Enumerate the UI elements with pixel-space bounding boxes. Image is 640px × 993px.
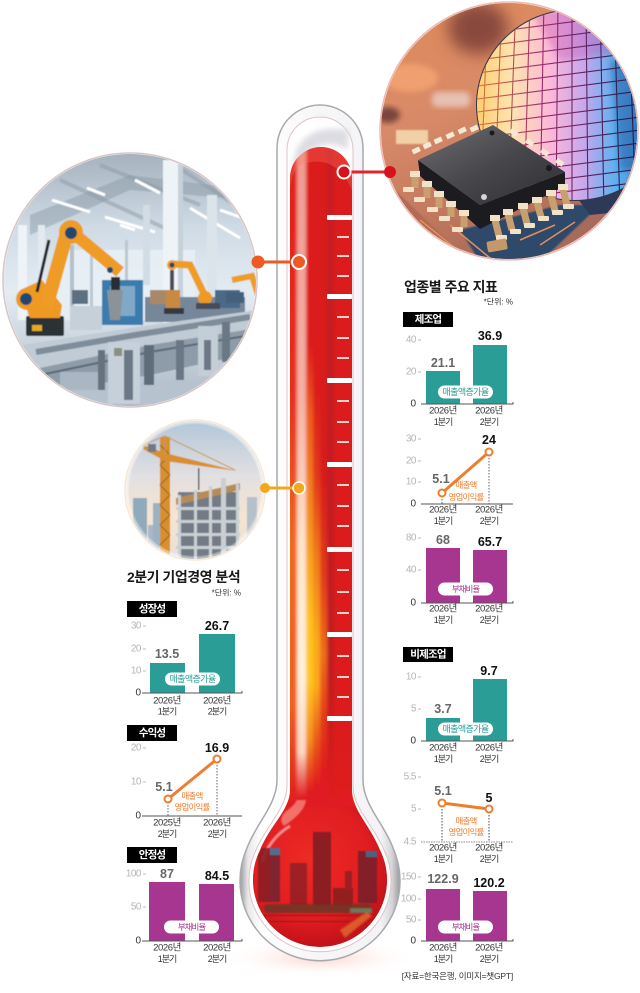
chart: non-manufacturing sales growth: 비제조업: [410, 648, 446, 660]
distant towers: [132, 498, 148, 540]
chart: profitability: 2026년: [203, 818, 231, 828]
chart: manufacturing operating margin: 5.1: [432, 472, 450, 486]
chart: profitability: 2분기: [158, 829, 177, 839]
chart: manufacturing debt ratio: 2분기: [480, 615, 499, 625]
chart: stability: 87: [160, 867, 174, 881]
chart: profitability: [127, 725, 242, 839]
glass tube and bulb: [240, 105, 400, 961]
chart: manufacturing sales growth: 매출액증가율: [442, 386, 489, 397]
chart: non-manufacturing debt ratio: 0: [410, 936, 416, 946]
chart: non-manufacturing sales growth: 9.7: [480, 664, 498, 678]
chart: stability: 2026년: [203, 942, 231, 954]
chart: growth: 30: [131, 620, 142, 632]
chart: manufacturing operating margin: 0: [410, 498, 416, 510]
chart: manufacturing debt ratio: 2026년: [475, 604, 503, 614]
right panel: indicators by industry: [401, 279, 513, 964]
chart: growth: 0: [135, 688, 141, 698]
chip top face: [418, 125, 565, 205]
thermometer: [239, 104, 401, 970]
chart: growth: 2026년: [153, 696, 181, 706]
chart: stability: 0: [135, 936, 141, 946]
chart: manufacturing operating margin: 10: [406, 476, 417, 488]
chart: growth: 1분기: [158, 706, 177, 716]
chart: manufacturing debt ratio: [406, 532, 513, 625]
chart: growth: 매출액증가율: [169, 673, 216, 684]
chart: stability: 2분기: [208, 954, 227, 964]
chip pins: [415, 175, 567, 236]
white columns: [162, 159, 178, 324]
connector: factory: [252, 255, 306, 269]
chart: non-manufacturing debt ratio: 2분기: [480, 954, 499, 964]
chart: manufacturing sales growth: 40: [406, 334, 417, 346]
chart: manufacturing operating margin: 30: [406, 434, 417, 444]
chart: stability: 100: [126, 868, 142, 880]
chart: manufacturing debt ratio: 65.7: [478, 535, 502, 549]
thermometer small ticks: [337, 236, 349, 698]
left panel: quarterly business analysis: [126, 569, 242, 964]
chart: non-manufacturing debt ratio: 100: [401, 894, 417, 904]
image circle: semiconductor chip: [375, 0, 640, 265]
chart: profitability: 2분기: [208, 829, 227, 839]
chart: growth: 2분기: [208, 706, 227, 716]
chart: manufacturing debt ratio: 0: [410, 598, 416, 608]
crane: [160, 437, 170, 559]
chart: manufacturing debt ratio: 1분기: [434, 615, 453, 625]
chart: non-manufacturing debt ratio: 122.9: [427, 872, 459, 886]
chart: manufacturing debt ratio: 80: [406, 532, 417, 544]
chip body side: [418, 160, 565, 229]
chart: profitability: 영업이익률: [174, 802, 211, 812]
chart: manufacturing sales growth: 20: [406, 366, 417, 378]
chart: non-manufacturing debt ratio: 부채비율: [452, 922, 480, 932]
chart: manufacturing sales growth: 2026년: [429, 406, 457, 416]
chart: profitability: 20: [131, 742, 142, 754]
title: 업종별 주요 지표: [404, 279, 498, 295]
chart: non-manufacturing sales growth: 2026년: [429, 742, 457, 754]
chart: growth: 2026년: [203, 696, 231, 706]
chart: stability: 1분기: [158, 954, 177, 964]
robot arm 2: [172, 264, 206, 298]
chart: manufacturing operating margin: [406, 433, 513, 526]
chart: profitability: 수익성: [139, 726, 165, 739]
chart: growth: [127, 601, 242, 716]
chart: non-manufacturing operating margin: [404, 772, 513, 864]
blue cabinet: [102, 280, 143, 325]
city in bulb: [258, 832, 377, 938]
connector: construction: [260, 482, 305, 494]
dome lighting: [290, 147, 352, 190]
chart: manufacturing operating margin: 영업이익률: [448, 492, 485, 502]
bulb sphere: [253, 848, 387, 947]
red liquid: [250, 145, 390, 950]
bulb floor shadow: [220, 938, 420, 978]
robot arm 1: [26, 316, 64, 336]
chart: growth: 26.7: [205, 619, 229, 633]
chart: manufacturing debt ratio: 2026년: [429, 604, 457, 614]
unit note: *단위: %: [212, 588, 241, 598]
chart: manufacturing sales growth: 36.9: [478, 329, 502, 343]
neck highlight: [281, 800, 306, 826]
chart: non-manufacturing sales growth: [403, 647, 513, 764]
chart: profitability: 매출액: [181, 791, 203, 801]
chart: manufacturing sales growth: 1분기: [434, 417, 453, 427]
chart: non-manufacturing operating margin: 2분기: [480, 854, 499, 864]
chart: growth: 13.5: [155, 647, 179, 661]
chip pads top: [412, 124, 564, 167]
title: 2분기 기업경영 분석: [127, 569, 240, 585]
chart: manufacturing operating margin: 2분기: [480, 516, 499, 526]
chart: stability: [126, 847, 242, 964]
circuit board: [396, 190, 455, 247]
blurred backdrop: [448, 2, 508, 54]
chart: non-manufacturing sales growth: 10: [406, 672, 417, 682]
chart: non-manufacturing sales growth: 2분기: [480, 754, 499, 764]
chart: manufacturing operating margin: 1분기: [434, 516, 453, 526]
chart: stability: 50: [131, 902, 142, 912]
ceiling beams and lights: [18, 155, 250, 320]
chart: non-manufacturing operating margin: 2026년: [429, 842, 457, 854]
chart: growth: 성장성: [139, 602, 165, 615]
chart: non-manufacturing debt ratio: 50: [406, 914, 417, 926]
chart: manufacturing operating margin: 2026년: [475, 504, 503, 516]
image circle: factory robots: [0, 150, 260, 412]
chart: non-manufacturing operating margin: 2026년: [475, 842, 503, 854]
chart: non-manufacturing debt ratio: 2026년: [475, 942, 503, 954]
building: [178, 492, 238, 562]
chart: manufacturing sales growth: 2026년: [475, 406, 503, 416]
chart: manufacturing operating margin: 24: [482, 433, 496, 447]
image circle: construction site: [125, 420, 265, 562]
chart: profitability: 5.1: [155, 780, 173, 794]
chart: non-manufacturing sales growth: 1분기: [434, 754, 453, 764]
source note: [자료=한국은행, 이미지=챗GPT]: [402, 971, 513, 981]
back machines: [72, 290, 88, 304]
chart: profitability: 10: [131, 776, 142, 788]
tube colour bands: [282, 145, 360, 807]
chart: non-manufacturing debt ratio: [401, 872, 513, 964]
chart: manufacturing sales growth: 21.1: [431, 356, 455, 370]
chart: non-manufacturing sales growth: 5: [411, 704, 417, 714]
chart: stability: 안정성: [139, 848, 165, 861]
chart: manufacturing sales growth: [403, 312, 513, 427]
chart: manufacturing sales growth: 2분기: [480, 417, 499, 427]
conveyor: [24, 310, 252, 348]
chart: non-manufacturing operating margin: 5: [411, 804, 417, 814]
machine boxes: [108, 342, 140, 404]
chart: non-manufacturing operating margin: 매출액: [455, 816, 477, 826]
chart: non-manufacturing operating margin: 4.5: [404, 836, 417, 848]
chart: non-manufacturing operating margin: 5.5: [404, 772, 417, 782]
chart: manufacturing operating margin: 2026년: [429, 504, 457, 516]
chart: manufacturing sales growth: 0: [410, 398, 416, 410]
chart: non-manufacturing operating margin: 5.1: [434, 784, 452, 798]
chart: non-manufacturing sales growth: 2026년: [475, 742, 503, 754]
chart: manufacturing operating margin: 매출액: [455, 480, 477, 490]
chart: stability: 부채비율: [178, 922, 206, 932]
chart: stability: 2026년: [153, 942, 181, 954]
chart: non-manufacturing debt ratio: 2026년: [429, 942, 457, 954]
chart: non-manufacturing debt ratio: 150: [401, 872, 417, 882]
chart: growth: 10: [131, 666, 142, 676]
chart: non-manufacturing sales growth: 0: [410, 736, 416, 746]
chart: non-manufacturing operating margin: 5: [486, 791, 493, 805]
chart: manufacturing debt ratio: 40: [406, 564, 417, 576]
chart: non-manufacturing operating margin: 1분기: [434, 854, 453, 864]
chart: non-manufacturing sales growth: 매출액증가율: [442, 723, 489, 734]
chart: non-manufacturing sales growth: 3.7: [434, 702, 452, 716]
chart: manufacturing operating margin: 20: [406, 456, 417, 466]
chart: manufacturing debt ratio: 부채비율: [452, 584, 480, 594]
chart: non-manufacturing operating margin: 영업이익률: [448, 827, 485, 837]
chart: manufacturing debt ratio: 68: [436, 533, 450, 547]
thermometer big ticks: [327, 215, 352, 721]
chart: profitability: 2025년: [153, 818, 181, 828]
connector: chip: [338, 166, 396, 178]
chart: profitability: 0: [135, 810, 141, 822]
chart: non-manufacturing debt ratio: 1분기: [434, 954, 453, 964]
chart: manufacturing sales growth: 제조업: [415, 312, 441, 326]
chart: growth: 20: [131, 644, 142, 654]
silicon wafer: [476, 9, 640, 201]
chart: stability: 84.5: [205, 869, 229, 883]
robot arm 3: [232, 276, 258, 295]
chart: profitability: 16.9: [205, 741, 229, 755]
unit note: *단위: %: [484, 296, 513, 306]
chart: non-manufacturing debt ratio: 120.2: [473, 876, 505, 890]
